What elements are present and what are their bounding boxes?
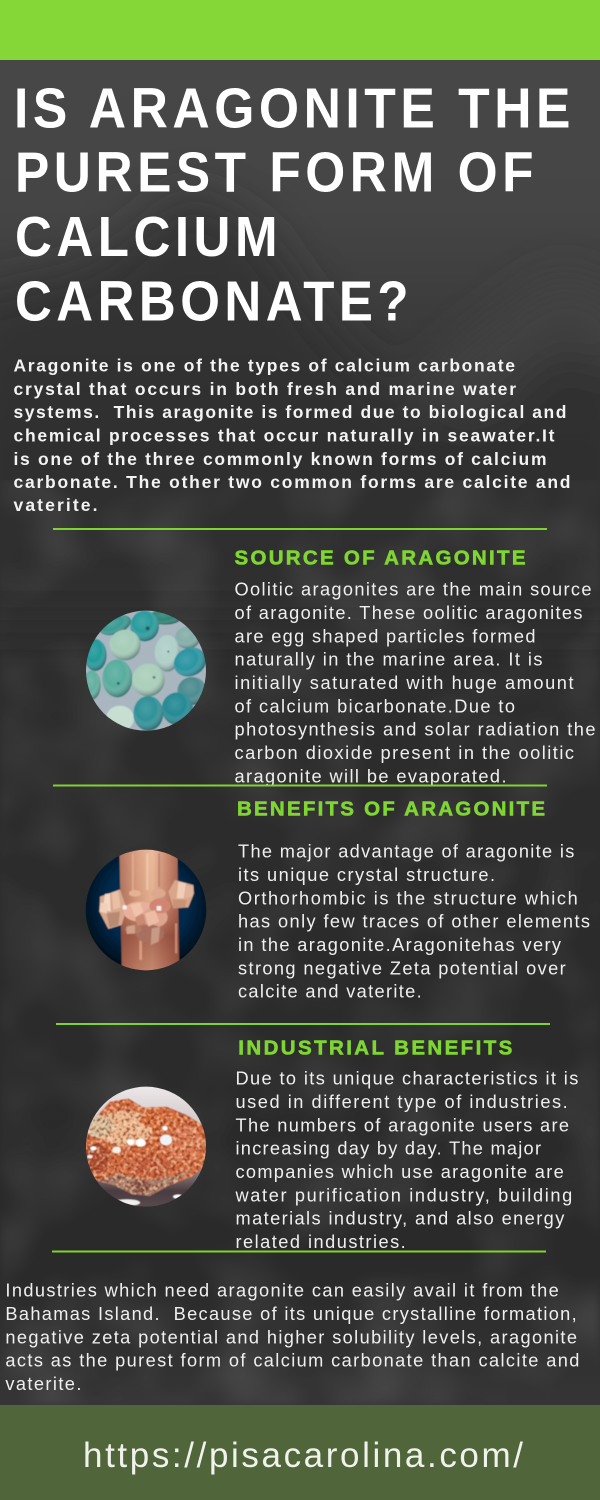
footer band with url — [0, 1405, 600, 1500]
body text: industrial benefits: related industries. — [236, 1232, 406, 1252]
intro paragraph: carbonate. The other two common forms are calcite and — [14, 472, 570, 492]
panel: benefits of aragonite — [83, 798, 590, 1002]
body text: source of aragonite: Oolitic aragonites are the main source — [234, 580, 592, 600]
body text: source of aragonite: of aragonite. These oolitic aragonites — [234, 603, 582, 623]
body text: industrial benefits: water purification industry, building — [234, 1185, 572, 1205]
footer band with url: https://pisacarolina.com/ — [83, 1436, 523, 1475]
icon: orange aragonite rock photo — [86, 1086, 206, 1207]
closing paragraph: negative zeta potential and higher solubility levels, aragonite — [5, 1327, 577, 1347]
intro paragraph: systems. This aragonite is formed due to biological and — [14, 402, 567, 422]
closing paragraph: Bahamas Island. Because of its unique crystalline formation, — [5, 1304, 577, 1324]
intro paragraph — [14, 356, 570, 515]
divider line 4 — [52, 1250, 546, 1252]
body text: benefits of aragonite: has only few traces of other elements — [238, 912, 590, 932]
body text: industrial benefits: used in different type of industries. — [236, 1092, 568, 1112]
body text: industrial benefits: materials industry, and also energy — [236, 1209, 565, 1229]
body text: industrial benefits: companies which use aragonite are — [236, 1162, 564, 1182]
intro paragraph: vaterite. — [14, 495, 98, 515]
body text: source of aragonite: of calcium bicarbonate.Due to — [234, 696, 515, 716]
intro paragraph: chemical processes that occur naturally in seawater.It — [14, 426, 555, 446]
body text: benefits of aragonite: its unique crystal structure. — [238, 865, 495, 885]
closing paragraph: vaterite. — [5, 1374, 81, 1394]
body text: benefits of aragonite: strong negative Zeta potential over — [238, 958, 566, 978]
icon: aragonite crystal column photo — [83, 847, 210, 973]
body text: source of aragonite: aragonite will be evaporated. — [234, 766, 506, 786]
intro paragraph: Aragonite is one of the types of calcium carbonate — [14, 356, 515, 376]
title: CARBONATE? — [15, 270, 413, 334]
body text: industrial benefits: The numbers of aragonite users are — [236, 1115, 569, 1135]
icon: teal aragonite stones photo — [83, 608, 211, 733]
body text: benefits of aragonite: calcite and vaterite. — [238, 982, 422, 1002]
body text: source of aragonite: carbon dioxide present in the oolitic — [234, 743, 574, 763]
body text: source of aragonite: photosynthesis and solar radiation the — [234, 720, 596, 740]
panel: source of aragonite — [83, 546, 596, 786]
body text: source of aragonite: are egg shaped particles formed — [234, 626, 536, 646]
heading: source of aragonite: SOURCE OF ARAGONITE — [234, 546, 526, 570]
body text: industrial benefits — [234, 1069, 578, 1252]
closing paragraph: acts as the purest form of calcium carbonate than calcite and — [5, 1351, 579, 1371]
intro paragraph: is one of the three commonly known forms of calcium — [14, 449, 546, 469]
body text: industrial benefits: increasing day by day. The major — [236, 1139, 541, 1159]
body text: benefits of aragonite: in the aragonite.Aragonitehas very — [238, 935, 562, 955]
panel: industrial benefits — [80, 1037, 578, 1252]
body text: source of aragonite: initially saturated with huge amount — [234, 673, 574, 693]
heading: industrial benefits: INDUSTRIAL BENEFITS — [238, 1037, 512, 1060]
body text: benefits of aragonite — [238, 842, 590, 1002]
body text: benefits of aragonite: Orthorhombic is the structure which — [238, 888, 578, 908]
heading: benefits of aragonite: BENEFITS OF ARAGONITE — [237, 798, 545, 821]
divider line 2 — [53, 784, 547, 786]
divider line 1 — [53, 528, 547, 530]
intro paragraph: crystal that occurs in both fresh and marine water — [14, 379, 516, 399]
title — [14, 76, 575, 334]
top green band — [0, 0, 600, 60]
closing paragraph: Industries which need aragonite can easily avail it from the — [5, 1281, 559, 1301]
body text: benefits of aragonite: The major advantage of aragonite is — [238, 842, 574, 862]
title: PUREST FORM OF — [15, 140, 538, 204]
divider line 3 — [56, 1023, 550, 1025]
body text: source of aragonite: naturally in the marine area. It is — [234, 650, 542, 670]
closing paragraph — [5, 1281, 579, 1394]
title: CALCIUM — [15, 205, 282, 269]
body text: source of aragonite — [234, 580, 596, 786]
body text: industrial benefits: Due to its unique characteristics it is — [236, 1069, 578, 1089]
